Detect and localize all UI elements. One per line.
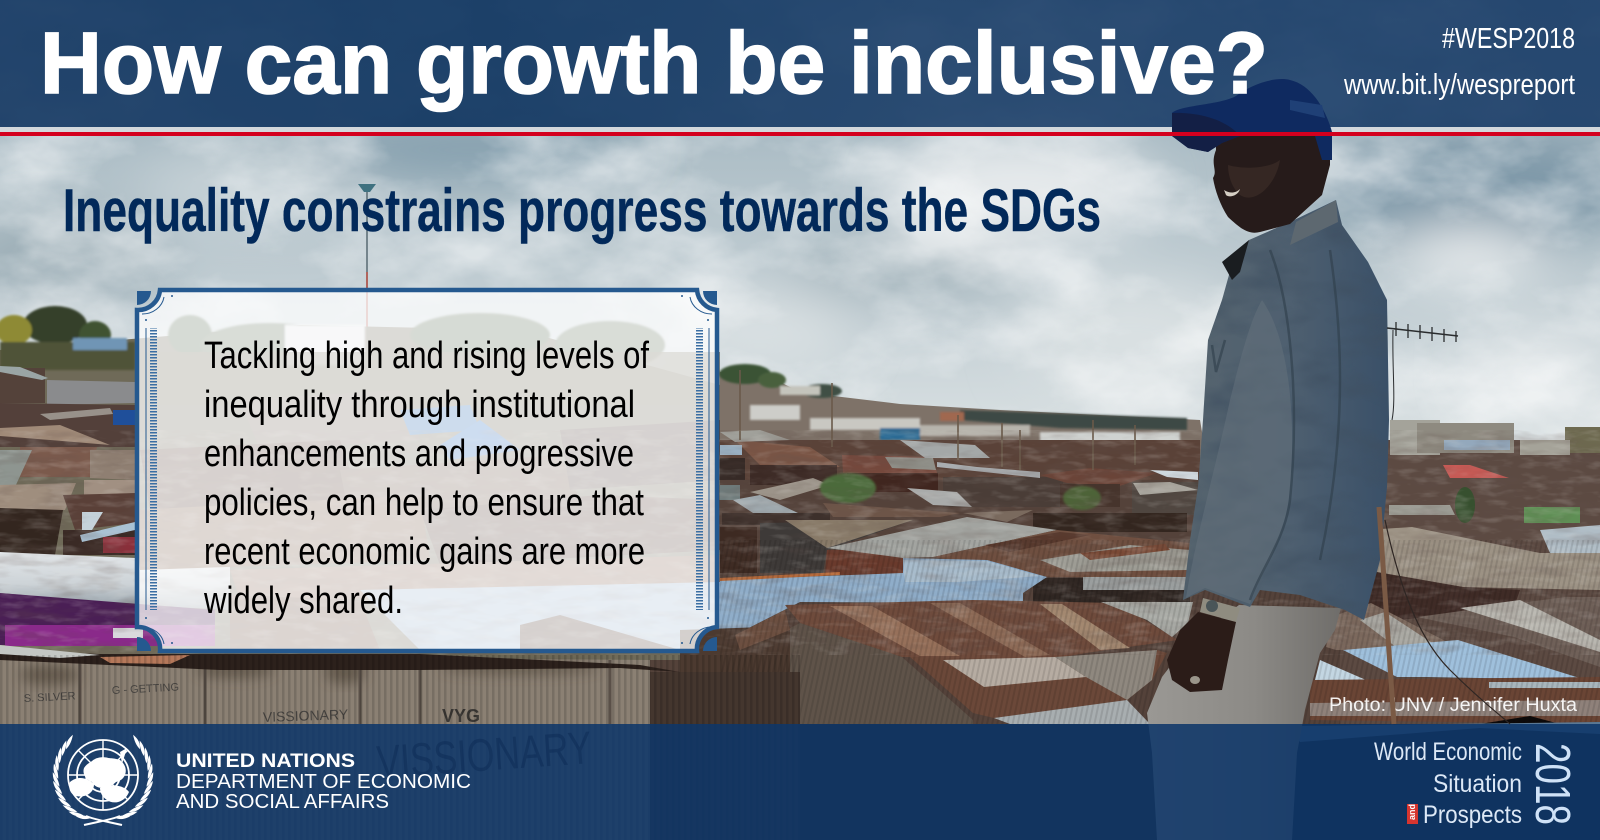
report title: Prospects [1423, 801, 1522, 829]
graffiti: silver: S. SILVER [24, 690, 76, 705]
panel body text: recent economic gains are more [204, 531, 645, 573]
report wordmark [1374, 738, 1579, 829]
shirt folds [1212, 250, 1340, 600]
panel body text: enhancements and progressive [204, 433, 634, 475]
report title [1374, 738, 1522, 829]
corrugated wall with graffiti [0, 645, 800, 840]
light mast [358, 184, 376, 330]
trousers [1147, 605, 1341, 840]
fine roof texture [0, 430, 1600, 724]
text panel [137, 290, 717, 651]
organisation name [176, 751, 471, 813]
ground below the man [800, 722, 1600, 840]
light strip under band [0, 127, 1600, 132]
shirt [1183, 200, 1389, 620]
graffiti: visionary: VISSIONARY [263, 706, 349, 725]
ground base [0, 440, 1600, 840]
bottom footer band [0, 724, 1600, 840]
olive wreath left [51, 734, 92, 820]
olive wreath right [114, 734, 155, 820]
red rule [0, 132, 1600, 136]
organisation name: UNITED NATIONS [176, 751, 355, 772]
antenna [1387, 322, 1458, 420]
corner ornaments [137, 291, 717, 651]
panel body text: widely shared. [203, 580, 403, 622]
top title band [0, 0, 1600, 127]
panel body text: Tackling high and rising levels of [204, 335, 649, 377]
foreground roofs centre [680, 517, 1193, 724]
organisation name: AND SOCIAL AFFAIRS [176, 791, 389, 813]
sky with clouds [0, 0, 1600, 470]
continents [69, 748, 129, 802]
rooftops and skyline right [1310, 420, 1600, 724]
report title: Situation [1433, 770, 1522, 798]
graffiti: VYG: VYG [442, 706, 480, 726]
man standing on roof [1147, 135, 1389, 840]
panel body text: policies, can help to ensure that [204, 482, 644, 524]
report title: World Economic [1374, 738, 1522, 766]
and badge: and [1407, 804, 1417, 820]
panel frame [137, 290, 717, 651]
right hatch rule [696, 328, 709, 610]
faint wall graffiti through band: VISSIONARY [375, 721, 593, 788]
main title: How can growth be inclusive? [40, 15, 1268, 112]
wooden pole and wire [1379, 507, 1510, 724]
hillside left and under panel [0, 306, 720, 660]
distant rooftops centre [719, 364, 1210, 532]
subheading: Inequality constrains progress towards the SDGs [63, 177, 1101, 244]
hand [1167, 612, 1236, 692]
wreath ribbon [84, 816, 122, 825]
photo credit: Photo: UNV / Jennifer Huxta [1329, 695, 1577, 716]
sleeve highlight [1186, 300, 1292, 604]
man's cap over band [1172, 79, 1332, 160]
graffiti: getting higher: G - GETTING [112, 681, 179, 697]
watch [1200, 598, 1240, 622]
neck and face [1213, 135, 1330, 233]
icon: United Nations emblem [51, 734, 155, 825]
organisation name: DEPARTMENT OF ECONOMIC [176, 771, 471, 793]
panel body text: inequality through institutional [204, 384, 635, 426]
left hatch rule [146, 328, 157, 610]
globe [68, 740, 138, 810]
shirt texture [1183, 200, 1389, 620]
panel body text [203, 335, 649, 622]
